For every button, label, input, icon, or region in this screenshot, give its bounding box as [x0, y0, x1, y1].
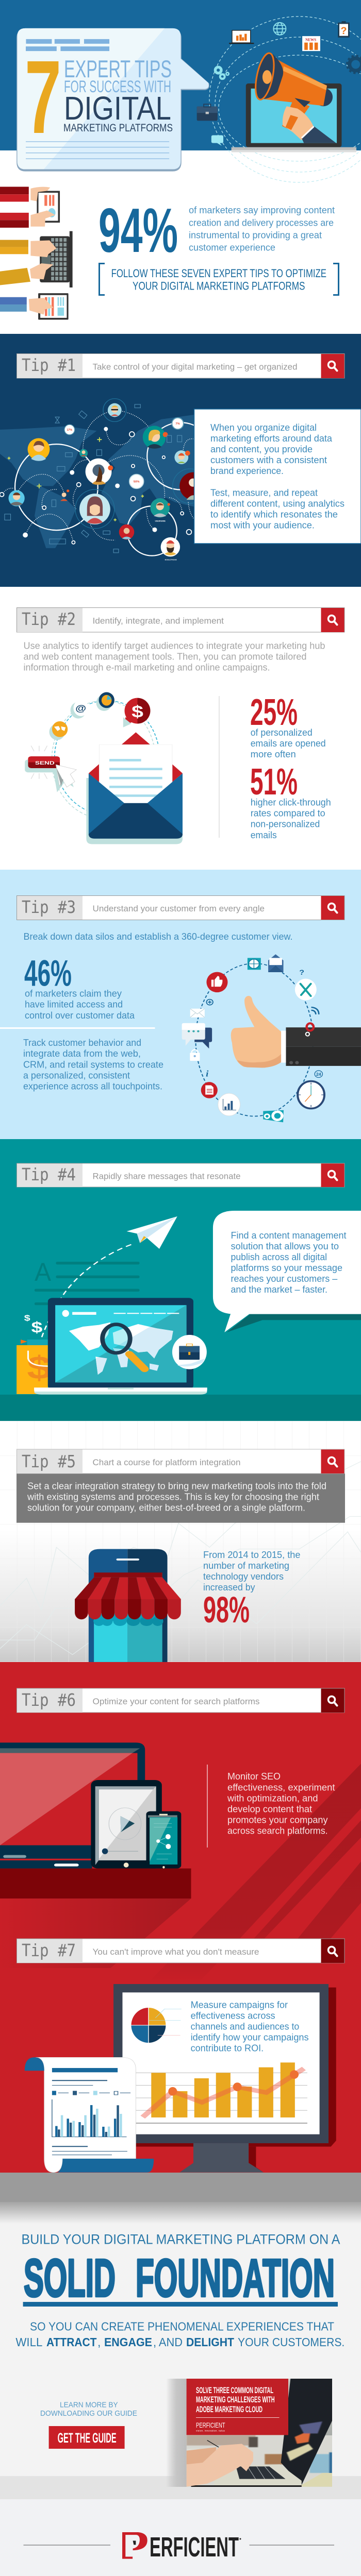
tip 5 stat text: technology vendors	[203, 1571, 284, 1582]
percent badges	[64, 418, 184, 488]
icon: tools	[295, 979, 317, 1001]
tip 3 tracking text: Track customer behavior and	[23, 1038, 141, 1048]
stat description: of marketers say improving content	[189, 205, 335, 215]
tip 7 text: identify how your campaigns	[191, 2032, 309, 2042]
tiny captions: USERNAME	[155, 520, 166, 522]
tip 3 tracking text	[23, 1038, 163, 1091]
title line: for success with: FOR SUCCESS WITH	[64, 77, 171, 96]
tip 1 white text panel: Test, measure, and repeat	[210, 488, 318, 498]
tip 6 search bar: Optimize your content for search platforms	[93, 1697, 260, 1706]
solid foundation wordmark: SOLID	[24, 2248, 116, 2308]
closing headline: BUILD YOUR DIGITAL MARKETING PLATFORM ON A	[22, 2232, 340, 2247]
tip 2 body text: information through e-mail marketing and online campaigns.	[24, 662, 270, 672]
tip 5 panel text	[27, 1481, 326, 1513]
person: sunglasses woman	[103, 399, 126, 421]
percent badges: 17%	[67, 429, 72, 432]
stat: 51 percent: rates compared to	[251, 808, 325, 819]
stat: 98 percent: 98%	[203, 1590, 250, 1631]
stat description: creation and delivery processes are	[189, 217, 334, 228]
stat: 46 percent: have limited access and	[25, 999, 123, 1009]
stat: 46 percent: control over customer data	[25, 1010, 135, 1021]
tip 3 search bar	[17, 895, 344, 920]
devices on shelf illustration	[0, 1742, 191, 1899]
bracketed call to action	[99, 264, 338, 295]
envelope back flaps	[89, 732, 183, 783]
shopping bag: $	[27, 1349, 51, 1386]
tip 2 search bar: Tip #2	[22, 609, 76, 629]
send button: SEND	[35, 760, 55, 766]
icon: dollar bubble	[123, 698, 150, 727]
tip 4 speech bubble: Find a content management	[231, 1230, 347, 1241]
stat: 51 percent: higher click-through	[251, 798, 331, 808]
tip 2 search bar	[17, 608, 344, 632]
tip 5 stat text: From 2014 to 2015, the	[203, 1550, 300, 1560]
magnifier	[103, 1325, 144, 1369]
attract engage delight line	[15, 2335, 344, 2349]
blue sleeve with tablet	[0, 293, 69, 319]
tip 4 speech bubble: reaches your customers –	[231, 1274, 337, 1284]
tip 6 text: with optimization, and	[227, 1793, 318, 1803]
stat: 51 percent: 51%	[250, 761, 298, 803]
stat: 46 percent: of marketers claim they	[25, 988, 122, 998]
stat: 46 percent: 46%	[24, 953, 72, 994]
icon: red document	[201, 1082, 218, 1098]
awning	[75, 1572, 181, 1619]
percent badges: 7%	[175, 422, 180, 426]
tip 1 white text panel	[194, 409, 361, 544]
title line: digital: DIGITAL	[64, 90, 171, 127]
cursor	[53, 765, 76, 792]
tip 1 search bar: Tip #1	[22, 355, 76, 375]
tip 2 body text: and web content management tools. Then, you can promote tailored	[24, 651, 306, 662]
tip 6 divider	[207, 1765, 208, 1848]
tip 7 search bar	[17, 1939, 344, 1963]
icon: thumbs red circle	[206, 972, 227, 992]
icon: news sheet: NEWS	[305, 38, 316, 42]
tip 1 white text panel: marketing efforts around data	[210, 433, 333, 444]
tip 3 intro text: Break down data silos and establish a 360-degree customer view.	[24, 931, 293, 942]
tip 5 panel text: solution for your company, either best-of-breed or a single platform.	[27, 1503, 305, 1513]
icon: padlock	[190, 1049, 200, 1061]
laptop display	[0, 1742, 145, 1869]
teal scallop shadow	[93, 1614, 163, 1626]
large white rings	[15, 422, 215, 556]
icon: plus	[206, 999, 213, 1005]
envelope front	[89, 773, 183, 835]
person: red circle	[119, 524, 134, 539]
closing headline	[15, 2232, 344, 2349]
tip 3 search bar: Understand your customer from every angle	[93, 904, 265, 913]
icon: red gear	[307, 1023, 314, 1031]
tip 4 speech bubble: and the market – faster.	[231, 1284, 327, 1295]
monitor screen	[122, 1992, 320, 2134]
pie chart	[131, 2008, 182, 2043]
tip 7 text: Measure campaigns for	[191, 2000, 288, 2010]
stat: 25 percent: of personalized	[251, 727, 313, 738]
device hands illustration	[0, 187, 73, 319]
phone storefront illustration	[75, 1549, 181, 1662]
tip 6 search bar	[17, 1688, 344, 1713]
cover title: SOLVE THREE COMMON DIGITAL	[196, 2385, 273, 2395]
thumbs up with icon ring	[182, 954, 361, 1122]
tip 5 panel text: Set a clear integration strategy to bring new marketing tools into the fold	[27, 1481, 326, 1492]
icon: at sign: @	[75, 704, 86, 714]
stat: 94 percent	[99, 195, 335, 265]
shopping bag	[17, 1340, 51, 1394]
icon: white envelope	[190, 1009, 205, 1018]
icon: chat bubbles	[182, 1023, 212, 1048]
tip 3 tracking text: CRM, and retail systems to create	[23, 1059, 163, 1070]
tablet	[91, 1780, 162, 1869]
tip 6 text: across search platforms.	[227, 1826, 328, 1836]
green plus marks	[8, 437, 144, 521]
tip 7 text: effectiveness across	[191, 2011, 275, 2021]
icon: briefcase	[197, 104, 218, 121]
stat description: customer experience	[189, 243, 275, 253]
learn more text	[40, 2401, 137, 2418]
icon: bar chart circle	[218, 1093, 240, 1116]
monitor shadow and stand	[136, 1988, 336, 2173]
stat: 94 percent: 94%	[99, 195, 178, 265]
icon: gears tile	[263, 1110, 284, 1122]
red section diagonal stripes	[0, 1764, 361, 1984]
tip 6 text	[227, 1771, 335, 1836]
tiny captions: MOBILEPHONE	[165, 559, 177, 561]
tip 1 search bar	[17, 353, 344, 378]
report scroll	[25, 2057, 154, 2173]
tip 1 white text panel: customers with a consistent	[210, 455, 327, 465]
email illustration	[25, 692, 183, 844]
closing headline: SO YOU CAN CREATE PHENOMENAL EXPERIENCES THAT	[30, 2320, 334, 2333]
tip 4 search bar: Rapidly share messages that resonate	[93, 1172, 240, 1181]
tip 1 white text panel: and content, you provide	[210, 444, 313, 454]
tip 1 search bar: Take control of your digital marketing – get organized	[93, 362, 297, 372]
dollar signs: $	[31, 1319, 42, 1336]
dotted connectors	[2, 410, 193, 543]
tip 3 tracking text: integrate data from the web,	[23, 1048, 141, 1059]
paper plane	[127, 1216, 177, 1249]
megaphone laptop illustration	[232, 52, 356, 152]
icon: laptop bar chart	[229, 30, 254, 44]
tip 6 text: effectiveness, experiment	[227, 1782, 335, 1792]
attract engage delight line: DELIGHT	[186, 2335, 234, 2349]
cover title: ADOBE MARKETING CLOUD	[196, 2404, 262, 2414]
icon: wifi	[311, 1007, 319, 1014]
header icons around the megaphone	[197, 21, 361, 146]
attract engage delight line: ,	[97, 2335, 101, 2349]
tip 4 speech bubble: platforms so your message	[231, 1263, 342, 1273]
tip 5 panel text: with existing systems and processes. This is key for choosing the right	[27, 1492, 319, 1502]
faint background document	[35, 1258, 140, 1305]
icon: cyan gears	[215, 67, 229, 79]
tip 3 search bar: Tip #3	[22, 897, 76, 917]
tip 1 white text panel: most with your audience.	[210, 520, 315, 531]
cover logo: PERFICIENT	[196, 2421, 225, 2429]
icon: clock	[298, 1081, 324, 1109]
book cast shadow	[166, 2379, 187, 2487]
person: teal circle	[143, 426, 166, 449]
attract engage delight line: ATTRACT	[46, 2335, 97, 2349]
hand	[231, 996, 281, 1067]
stat: 25 percent: 25%	[250, 692, 298, 733]
get the guide button: GET THE GUIDE	[58, 2430, 117, 2446]
tip 6 text: Monitor SEO	[227, 1771, 281, 1782]
dollar signs	[24, 1314, 42, 1336]
tip 1 white text panel: different content, using analytics	[210, 499, 344, 509]
tip 5 stat text: increased by	[203, 1582, 255, 1592]
percent badges: 50%	[134, 481, 140, 484]
tip 2 body text	[24, 640, 325, 672]
cover photo	[187, 2379, 333, 2487]
cover title: MARKETING CHALLENGES WITH	[196, 2395, 275, 2404]
person: teal username	[150, 498, 170, 518]
dashed flight path	[41, 1245, 131, 1340]
person: dark red circle at edge	[172, 468, 194, 504]
cover red panel	[187, 2379, 288, 2435]
tip 1 white text panel: brand experience.	[210, 466, 284, 476]
laptop and paper plane illustration	[17, 1216, 207, 1395]
header dashed orbit rings	[209, 16, 361, 182]
monitor frame	[113, 1984, 329, 2143]
white rule	[0, 1027, 155, 1029]
tip 7 text: contribute to ROI.	[191, 2043, 264, 2053]
tip 3 tracking text: experience across all touchpoints.	[23, 1081, 162, 1091]
tip 6 text: develop content that	[227, 1804, 312, 1814]
faint background document: A	[35, 1258, 52, 1286]
attract engage delight line: WILL	[15, 2335, 43, 2349]
get the guide button	[49, 2426, 125, 2449]
shelf	[0, 1869, 191, 1899]
laptop	[34, 1298, 207, 1395]
tip 5 stat text	[203, 1550, 300, 1631]
big number seven: 7	[25, 39, 61, 155]
tip 2 search bar: Identify, integrate, and implement	[93, 616, 224, 625]
tip 1 white text panel: to identify which resonates the	[210, 509, 338, 519]
icon: at sign	[71, 700, 89, 719]
tip 4 search bar: Tip #4	[22, 1164, 76, 1184]
perficient logo	[24, 2532, 334, 2563]
click sparks	[31, 745, 47, 779]
small nodes	[23, 427, 157, 537]
person: white circle with hood	[86, 459, 112, 485]
icon: 24 hours	[315, 1071, 322, 1077]
briefcase badge	[172, 1335, 207, 1369]
phone	[146, 1811, 181, 1869]
dashed orbit	[52, 701, 159, 819]
icon: chat bubble	[211, 135, 223, 146]
stat: 25 percent: more often	[251, 749, 296, 759]
tip 7 text	[191, 2000, 309, 2053]
title line: marketing platforms: MARKETING PLATFORMS	[63, 122, 173, 134]
tip 5 stat text: number of marketing	[203, 1561, 289, 1571]
letter	[99, 744, 172, 805]
tip 4 speech bubble: solution that allows you to	[231, 1241, 339, 1251]
monitor with charts	[25, 1984, 336, 2173]
learn more text: LEARN MORE BY	[60, 2401, 118, 2409]
continents	[0, 415, 194, 548]
red sleeves with tablet	[0, 187, 60, 228]
tip 2 body text: Use analytics to identify target audiences to integrate your marketing hub	[24, 640, 325, 651]
tiny captions	[155, 520, 177, 561]
tip 3 tracking text: a personalized, consistent	[23, 1070, 130, 1080]
person: large light blue circle	[75, 489, 114, 529]
icon: question: ?	[299, 969, 304, 977]
icon: white gear	[306, 1032, 309, 1036]
tip 2 divider	[219, 696, 220, 838]
icon: pie	[96, 692, 114, 711]
stat: 25 percent	[250, 692, 326, 759]
stat: 51 percent	[250, 761, 331, 840]
cover logo	[196, 2421, 225, 2432]
cover title	[196, 2385, 275, 2414]
notification dots	[67, 432, 190, 506]
perficient logo: ERFICIENT	[150, 2532, 239, 2563]
icon: dark gear	[347, 56, 361, 73]
tip 5 search bar and panel: Tip #5	[22, 1451, 76, 1471]
attract engage delight line: , AND	[153, 2335, 183, 2349]
book cover	[166, 2379, 333, 2487]
stat: 51 percent: emails	[251, 830, 277, 840]
icon: globe	[273, 23, 286, 35]
icon: news sheet	[302, 36, 320, 51]
cover logo: vision. innovation. value	[196, 2430, 225, 2432]
tip 7 search bar: You can't improve what you don't measure	[93, 1947, 259, 1957]
tip 4 speech bubble	[213, 1211, 361, 1332]
tip 5 search bar and panel	[17, 1449, 345, 1523]
envelope shadow	[86, 778, 183, 844]
dashed ring	[195, 963, 313, 1116]
combo chart	[136, 2062, 307, 2123]
person: hat and beard	[161, 537, 180, 556]
stat description	[189, 205, 335, 253]
tip 7 search bar: Tip #7	[22, 1940, 76, 1960]
solid foundation wordmark	[24, 2248, 335, 2308]
tip 7 text: channels and audiences to	[191, 2021, 299, 2031]
tip 4 speech bubble: publish across all digital	[231, 1252, 327, 1262]
dollar signs: $	[24, 1314, 30, 1323]
yellow sleeves with keyboard	[0, 231, 73, 287]
learn more text: DOWNLOADING OUR GUIDE	[40, 2409, 137, 2418]
icon: globe tile	[248, 958, 261, 970]
stat: 51 percent: non-personalized	[251, 819, 320, 829]
tip 6 search bar: Tip #6	[22, 1690, 76, 1710]
stat: 46 percent	[24, 953, 135, 1021]
send button	[25, 756, 60, 772]
stat: 25 percent: emails are opened	[251, 738, 326, 749]
person: mustache man	[9, 490, 25, 506]
stat description: instrumental to providing a great	[189, 230, 322, 240]
tip 1 white text panel: When you organize digital	[210, 422, 317, 433]
title line: expert tips: EXPERT TIPS	[64, 55, 172, 82]
icon: 24 hours: 24	[316, 1072, 321, 1077]
bracketed call to action: YOUR DIGITAL MARKETING PLATFORMS	[133, 279, 305, 293]
minor people	[60, 449, 188, 501]
icon: info: i	[206, 1069, 208, 1078]
attract engage delight line: ENGAGE	[104, 2335, 152, 2349]
icon: question clipboard: ?	[340, 25, 347, 37]
world map network illustration	[0, 399, 215, 561]
tip 4 search bar	[17, 1163, 344, 1187]
icon: world circle	[50, 721, 68, 740]
tip 6 text: promotes your company	[227, 1815, 328, 1825]
icon: envelope	[268, 954, 284, 972]
suit sleeve	[281, 1027, 361, 1066]
person: yellow circle	[28, 438, 50, 461]
tip 5 search bar and panel: Chart a course for platform integration	[93, 1458, 240, 1467]
faint zigzag chart lines	[0, 1462, 361, 1655]
attract engage delight line: YOUR CUSTOMERS.	[238, 2335, 344, 2349]
faint app glyphs	[5, 404, 182, 553]
headline speech bubble	[17, 28, 209, 172]
icon: dollar bubble: $	[132, 702, 143, 721]
icon: question clipboard	[338, 21, 350, 38]
